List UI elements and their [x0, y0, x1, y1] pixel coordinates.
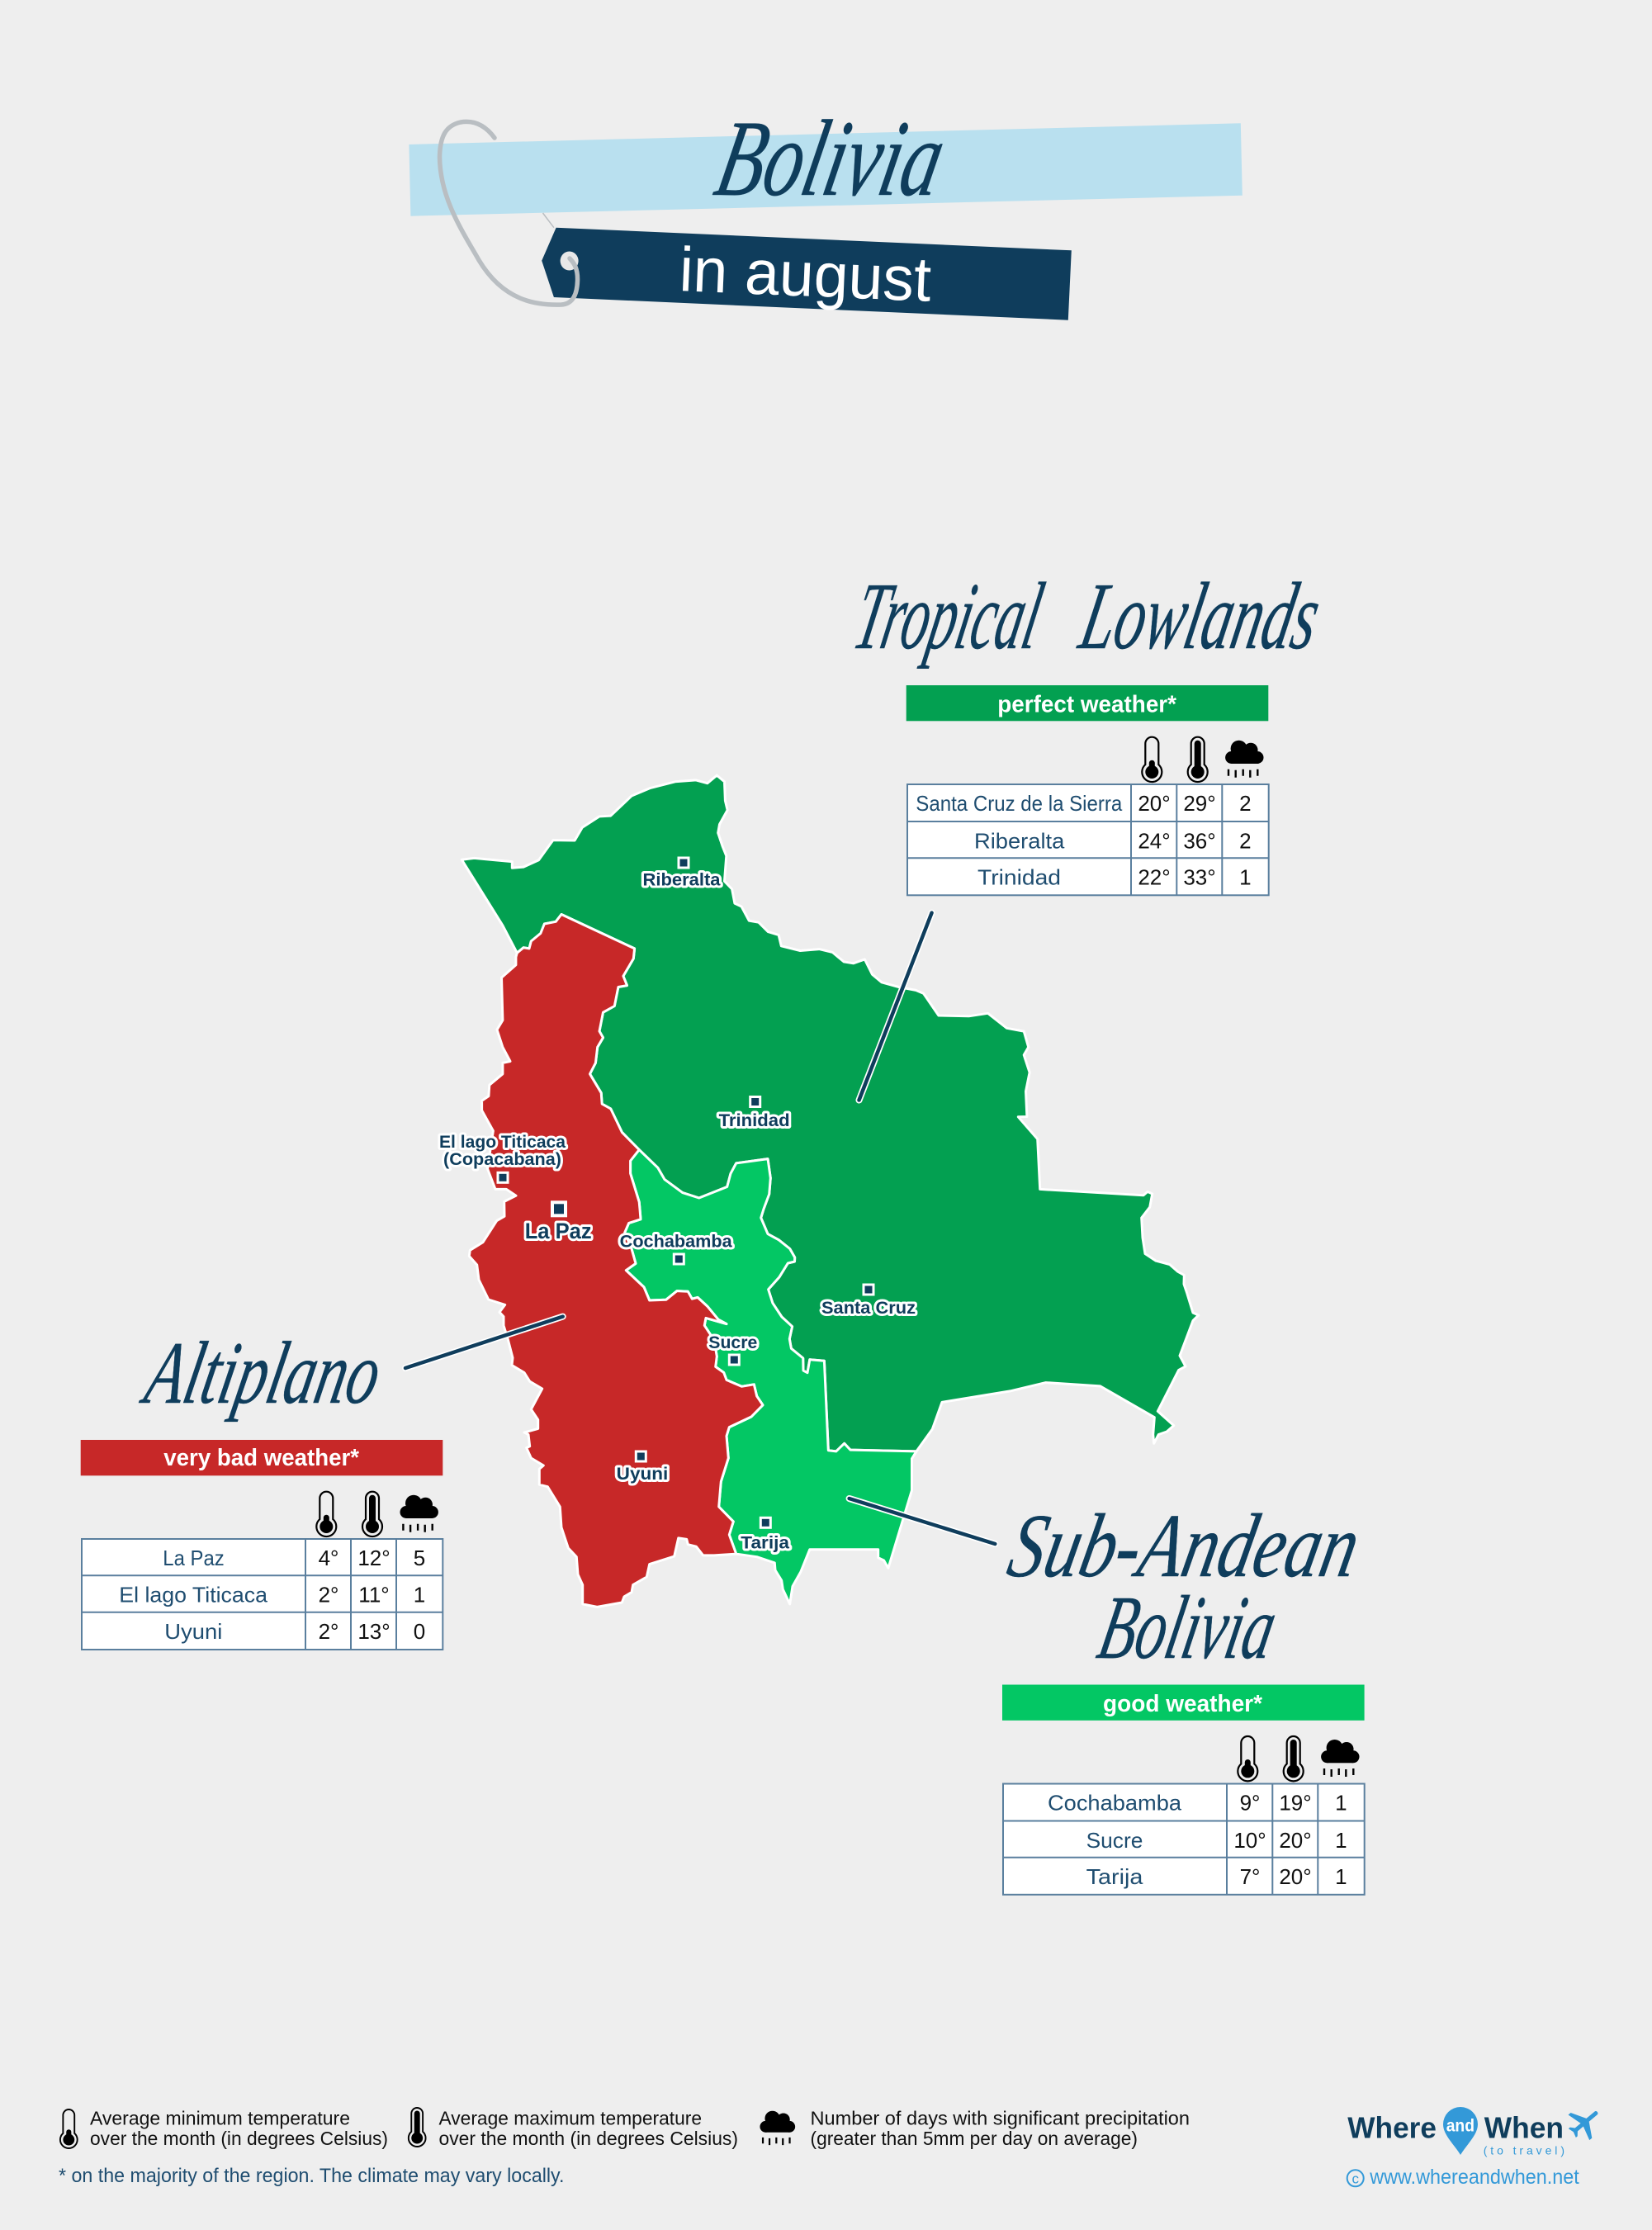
city: Trinidad [719, 1096, 790, 1130]
legend text: minimum temperature: over the month (in degrees Celsius) [90, 2128, 388, 2149]
wordmark: and: and [1446, 2117, 1474, 2136]
title band [409, 123, 1243, 216]
heading: Tropical Lowlands: Tropical [846, 563, 1052, 670]
icon: maximum temperature [1188, 737, 1208, 782]
weather banner: perfect weather* [997, 691, 1177, 717]
icon: minimum temperature [316, 1492, 336, 1536]
map of Bolivia [462, 775, 1199, 1607]
legend text: precipitation: Number of days with significant precipitation [811, 2107, 1190, 2128]
climate table: 1 [1335, 1790, 1347, 1815]
wordmark: to travel: (to travel) [1484, 2143, 1564, 2157]
heading: Sub-Andean Bolivia: Bolivia [1091, 1578, 1285, 1678]
city: El lago Titicaca: (Copacabana) [443, 1150, 561, 1169]
climate table: El lago Titicaca [119, 1583, 268, 1607]
website: www.whereandwhen.net [1369, 2166, 1579, 2189]
city: Santa Cruz [821, 1285, 916, 1318]
climate table: Sucre [1086, 1828, 1143, 1853]
logo: Where and When [1347, 2100, 1608, 2189]
icon: minimum temperature [1142, 737, 1162, 782]
panel: Tropical Lowlands [846, 563, 1329, 895]
climate table: 5 [414, 1546, 425, 1570]
region: Tropical Lowlands [462, 775, 1199, 1451]
weather banner [1002, 1684, 1365, 1721]
climate table: 11° [358, 1583, 390, 1607]
heading: Sub-Andean Bolivia: Sub-Andean [1001, 1496, 1369, 1597]
climate table: Santa Cruz de la Sierra [916, 791, 1123, 816]
legend text: maximum temperature: Average maximum temperature [439, 2107, 702, 2128]
climate table: 33° [1183, 865, 1216, 890]
region: Altiplano [469, 915, 763, 1607]
climate table [1003, 1783, 1365, 1895]
climate table: 12° [357, 1546, 391, 1570]
city: El lago Titicaca [439, 1133, 566, 1182]
climate table: 29° [1183, 791, 1216, 816]
heading: Altiplano: Altiplano [135, 1323, 390, 1423]
subtitle: in august: in august [678, 234, 933, 315]
subtitle tag [542, 228, 1072, 320]
climate table: 36° [1183, 829, 1216, 854]
city: Uyuni [617, 1451, 668, 1484]
legend text: precipitation: (greater than 5mm per day on average) [811, 2128, 1138, 2149]
climate table: 1 [414, 1583, 425, 1607]
climate table: 0 [414, 1619, 425, 1644]
copyright symbol [1347, 2170, 1364, 2186]
city: Cochabamba [620, 1233, 732, 1264]
title block [409, 97, 1243, 320]
city markers and labels [439, 858, 916, 1553]
city: Trinidad: Trinidad [719, 1111, 790, 1130]
climate table: La Paz [163, 1546, 225, 1570]
city: La Paz [525, 1202, 592, 1243]
climate table: 2° [319, 1583, 338, 1607]
climate table: Trinidad [977, 865, 1061, 890]
tag string [543, 213, 554, 228]
climate table: 20° [1279, 1864, 1312, 1889]
climate table [907, 784, 1269, 895]
legend text: minimum temperature [90, 2107, 388, 2149]
climate table: Riberalta [974, 829, 1065, 854]
legend text: precipitation [811, 2107, 1190, 2149]
weather banner: very bad weather* [163, 1445, 360, 1471]
climate table: 22° [1138, 865, 1171, 890]
icon: minimum temperature [1238, 1736, 1257, 1781]
icon: maximum temperature [1284, 1736, 1304, 1781]
title: Bolivia: Bolivia [707, 97, 955, 219]
city: Sucre: Sucre [708, 1333, 757, 1352]
city: El lago Titicaca: El lago Titicaca [439, 1133, 566, 1152]
legend text: maximum temperature: over the month (in degrees Celsius) [439, 2128, 738, 2149]
legend text: maximum temperature [439, 2107, 738, 2149]
icon: minimum temperature [60, 2109, 78, 2148]
city: Riberalta: Riberalta [642, 870, 721, 889]
climate table: 24° [1138, 829, 1171, 854]
city: Santa Cruz: Santa Cruz [821, 1299, 916, 1318]
city: Cochabamba: Cochabamba [620, 1233, 732, 1252]
climate table: 20° [1138, 791, 1171, 816]
climate table: 2° [319, 1619, 338, 1644]
climate table: 9° [1240, 1790, 1260, 1815]
icon: plane [1561, 2100, 1608, 2146]
heading: Sub-Andean Bolivia [1001, 1496, 1369, 1678]
climate table: 2 [1239, 829, 1252, 854]
legend text: minimum temperature: Average minimum temperature [90, 2107, 350, 2128]
wordmark: When: When [1484, 2110, 1564, 2144]
climate table: Tarija [1086, 1864, 1143, 1889]
climate table: 10° [1233, 1828, 1266, 1853]
weather banner [81, 1440, 443, 1475]
climate table: 13° [357, 1619, 391, 1644]
city: La Paz: La Paz [525, 1219, 592, 1243]
weather banner: good weather* [1103, 1691, 1263, 1717]
climate table: 19° [1279, 1790, 1312, 1815]
city: Tarija: Tarija [741, 1534, 789, 1553]
icon: maximum temperature [362, 1492, 382, 1536]
icon: maximum temperature [409, 2108, 426, 2147]
climate table: Uyuni [164, 1619, 222, 1644]
copyright symbol: c [1351, 2171, 1359, 2186]
climate table: 7° [1240, 1864, 1260, 1889]
heading: Tropical Lowlands: Lowlands [1071, 563, 1329, 670]
icon: map pin [1443, 2107, 1478, 2155]
climate table: 20° [1279, 1828, 1312, 1853]
icon: rain [1321, 1740, 1359, 1777]
tag hole [561, 251, 579, 271]
wordmark: Where: Where [1347, 2110, 1437, 2144]
panel: Altiplano [81, 1323, 443, 1650]
tag ring [439, 121, 578, 305]
climate table: 1 [1239, 865, 1252, 890]
icon: rain [1225, 741, 1263, 778]
climate table: Cochabamba [1048, 1790, 1182, 1815]
callout line: Sub-Andean [850, 1499, 995, 1544]
icon: rain [760, 2111, 795, 2145]
city: Sucre [708, 1333, 757, 1365]
city: Riberalta [642, 858, 721, 889]
climate table: 2 [1239, 791, 1252, 816]
footnote: * on the majority of the region. The climate may vary locally. [59, 2165, 564, 2187]
climate table: 1 [1335, 1828, 1347, 1853]
climate table [82, 1539, 443, 1650]
climate table: 4° [319, 1546, 338, 1570]
weather banner [906, 685, 1268, 721]
climate table: 1 [1335, 1864, 1347, 1889]
city: Uyuni: Uyuni [617, 1465, 668, 1484]
city: Tarija [741, 1517, 789, 1553]
panel: Sub-Andean Bolivia [1001, 1496, 1369, 1895]
legend [59, 2107, 1190, 2187]
callout line: Altiplano [405, 1317, 563, 1368]
callout line: Tropical Lowlands [859, 913, 932, 1100]
icon: rain [400, 1495, 438, 1532]
region: Sub-Andean Bolivia [625, 1150, 916, 1604]
